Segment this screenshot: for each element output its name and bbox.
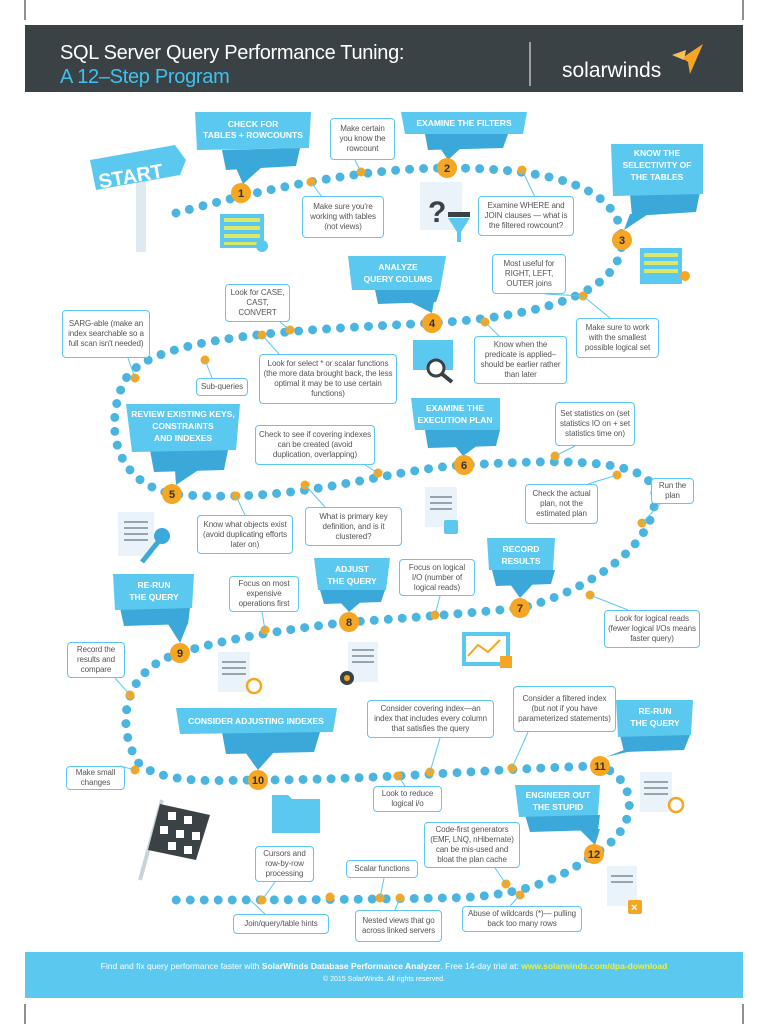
ribbon: check for tables: TABLES + ROWCOUNTS xyxy=(203,130,303,140)
title: SQL Server Query Performance Tuning: xyxy=(60,42,404,64)
START sign xyxy=(90,145,186,252)
text: Make certain you know the rowcount xyxy=(340,124,385,153)
icon: doc X: × xyxy=(631,902,637,914)
step numbers: 8 xyxy=(346,617,352,629)
text: Cursors and row-by-row processing xyxy=(263,849,306,878)
ribbon: adjust query: THE QUERY xyxy=(327,576,377,586)
text: Nested views that go across linked servers xyxy=(362,916,435,935)
ribbon: engineer stupid xyxy=(515,785,600,845)
ribbon: engineer stupid: THE STUPID xyxy=(533,802,583,812)
text: Make sure you're working with tables (not views) xyxy=(310,202,376,231)
text: Consider a filtered index (but not if you have parameterized statements) xyxy=(518,694,611,723)
text: Focus on most expensive operations first xyxy=(238,579,290,608)
text: Most useful for RIGHT, LEFT, OUTER joins xyxy=(504,259,554,288)
footer: Find and fix query performance faster with SolarWinds Database Performance Analyzer. Free 14-day trial at: www.solarwinds.com/dpa-download xyxy=(101,961,667,971)
text: Run the plan xyxy=(659,481,686,500)
icon: table bulb xyxy=(640,248,690,284)
ribbon: execution plan xyxy=(411,398,500,456)
text: Code-first generators (EMF, LNQ, nHibernate) can be mis-used and bloat the plan cache xyxy=(430,825,514,864)
START sign: START xyxy=(97,160,165,193)
footer: © 2015 SolarWinds. All rights reserved. xyxy=(323,975,445,983)
text: Check to see if covering indexes can be created (avoid duplication, overlapping) xyxy=(259,430,371,459)
ribbon: re-run left: RE-RUN xyxy=(137,580,171,590)
text: Look for select * or scalar functions (the more data brought back, the less optimal it may be to use certain functions) xyxy=(264,359,392,398)
ribbon: record results: RESULTS xyxy=(501,556,541,566)
ribbon: selectivity: KNOW THE xyxy=(634,148,680,158)
text: Look for logical reads (fewer logical I/Os means faster query) xyxy=(608,614,696,643)
ribbon: record results xyxy=(487,538,555,598)
step numbers xyxy=(162,158,632,864)
logo: solarwinds xyxy=(562,59,661,82)
text: Make sure to work with the smallest possible logical set xyxy=(585,323,650,352)
text: Know what objects exist (avoid duplicating efforts later on) xyxy=(203,520,287,548)
step numbers: 2 xyxy=(444,163,450,175)
icon: doc refresh right xyxy=(640,772,683,812)
ribbon: re-run right: RE-RUN xyxy=(638,706,672,716)
ribbon: re-run left: THE QUERY xyxy=(129,592,179,602)
icon: doc refresh xyxy=(218,652,261,693)
ribbon: review keys: CONSTRAINTS xyxy=(152,421,214,431)
text: Look for CASE, CAST, CONVERT xyxy=(231,288,284,317)
orange leader dots xyxy=(115,160,660,914)
ribbon: execution plan: EXECUTION PLAN xyxy=(417,415,493,425)
ribbons xyxy=(113,112,703,845)
ribbon: review keys: REVIEW EXISTING KEYS, xyxy=(131,409,235,419)
step numbers: 1 xyxy=(238,188,244,200)
text: Examine WHERE and JOIN clauses — what is the filtered rowcount? xyxy=(485,201,567,230)
ribbon: re-run right xyxy=(606,700,693,757)
text: What is primary key definition, and is it clustered? xyxy=(319,512,388,540)
dotted path xyxy=(115,168,655,900)
text: Record the results and compare xyxy=(77,645,115,674)
header bar: A 12–Step Program xyxy=(60,66,229,88)
ribbon: execution plan: EXAMINE THE xyxy=(426,403,484,413)
icon: doc check xyxy=(425,487,458,534)
footer xyxy=(25,952,743,998)
icon: folder xyxy=(272,795,320,833)
header bar xyxy=(25,25,743,92)
ribbon: consider indexes xyxy=(176,708,337,770)
ribbon: review keys: AND INDEXES xyxy=(154,433,212,443)
step numbers: 11 xyxy=(594,761,606,773)
text: Join/query/table hints xyxy=(244,919,318,928)
step numbers: 10 xyxy=(252,775,264,787)
text: Check the actual plan, not the estimated plan xyxy=(532,489,590,518)
ribbon: re-run right: THE QUERY xyxy=(630,718,680,728)
ribbon: re-run left xyxy=(113,574,194,643)
text: Make small changes xyxy=(76,768,115,787)
ribbon: analyze: ANALYZE xyxy=(378,262,418,272)
ribbon: adjust query xyxy=(314,558,390,612)
text: Look to reduce logical i/o xyxy=(382,789,433,808)
ribbon: analyze: QUERY COLUMS xyxy=(364,274,433,284)
ribbon: record results: RECORD xyxy=(503,544,539,554)
icon: spreadsheet xyxy=(220,214,268,252)
step numbers: 9 xyxy=(177,648,183,660)
text: Know when the predicate is applied–should be earlier rather than later xyxy=(481,340,560,379)
icon: question funnel: ? xyxy=(428,196,446,229)
ribbon: review keys xyxy=(126,404,240,485)
icon: doc X xyxy=(607,866,642,914)
step numbers: 3 xyxy=(619,235,625,247)
text: Abuse of wildcards (*)— pulling back too many rows xyxy=(468,909,576,928)
ribbon: analyze xyxy=(348,256,446,313)
icon: chart xyxy=(462,632,512,668)
text: Set statistics on (set statistics IO on + set statistics time on) xyxy=(560,409,630,438)
ribbon: engineer stupid: ENGINEER OUT xyxy=(526,790,591,800)
ribbon: selectivity xyxy=(611,144,703,230)
ribbon: adjust query: ADJUST xyxy=(335,564,370,574)
step numbers: 7 xyxy=(517,603,523,615)
ribbon: consider indexes: CONSIDER ADJUSTING INDEXES xyxy=(188,716,324,726)
text: Focus on logical I/O (number of logical reads) xyxy=(409,562,465,592)
icon: doc key xyxy=(118,512,170,562)
ribbon: examine filters: EXAMINE THE FILTERS xyxy=(416,118,512,128)
icon: question funnel xyxy=(420,182,470,242)
ribbon: selectivity: THE TABLES xyxy=(631,172,684,182)
ribbon: check for tables xyxy=(195,112,311,184)
icon: checkered flag xyxy=(140,800,210,880)
step numbers: 12 xyxy=(588,849,600,861)
ribbon: examine filters xyxy=(401,112,527,160)
text: Scalar functions xyxy=(354,864,410,873)
step numbers: 6 xyxy=(461,460,467,472)
icon: magnifier table xyxy=(413,340,453,382)
text: Sub-queries xyxy=(201,382,243,391)
text: Consider covering index—an index that includes every column that satisfies the query xyxy=(374,704,487,733)
icon: doc gear xyxy=(340,642,378,685)
text: SARG-able (make an index searchable so a full scan isn't needed) xyxy=(68,319,144,348)
callouts xyxy=(62,118,700,942)
step numbers: 5 xyxy=(169,489,175,501)
step numbers: 4 xyxy=(429,318,436,330)
ribbon: selectivity: SELECTIVITY OF xyxy=(623,160,691,170)
ribbon: check for tables: CHECK FOR xyxy=(228,119,278,129)
